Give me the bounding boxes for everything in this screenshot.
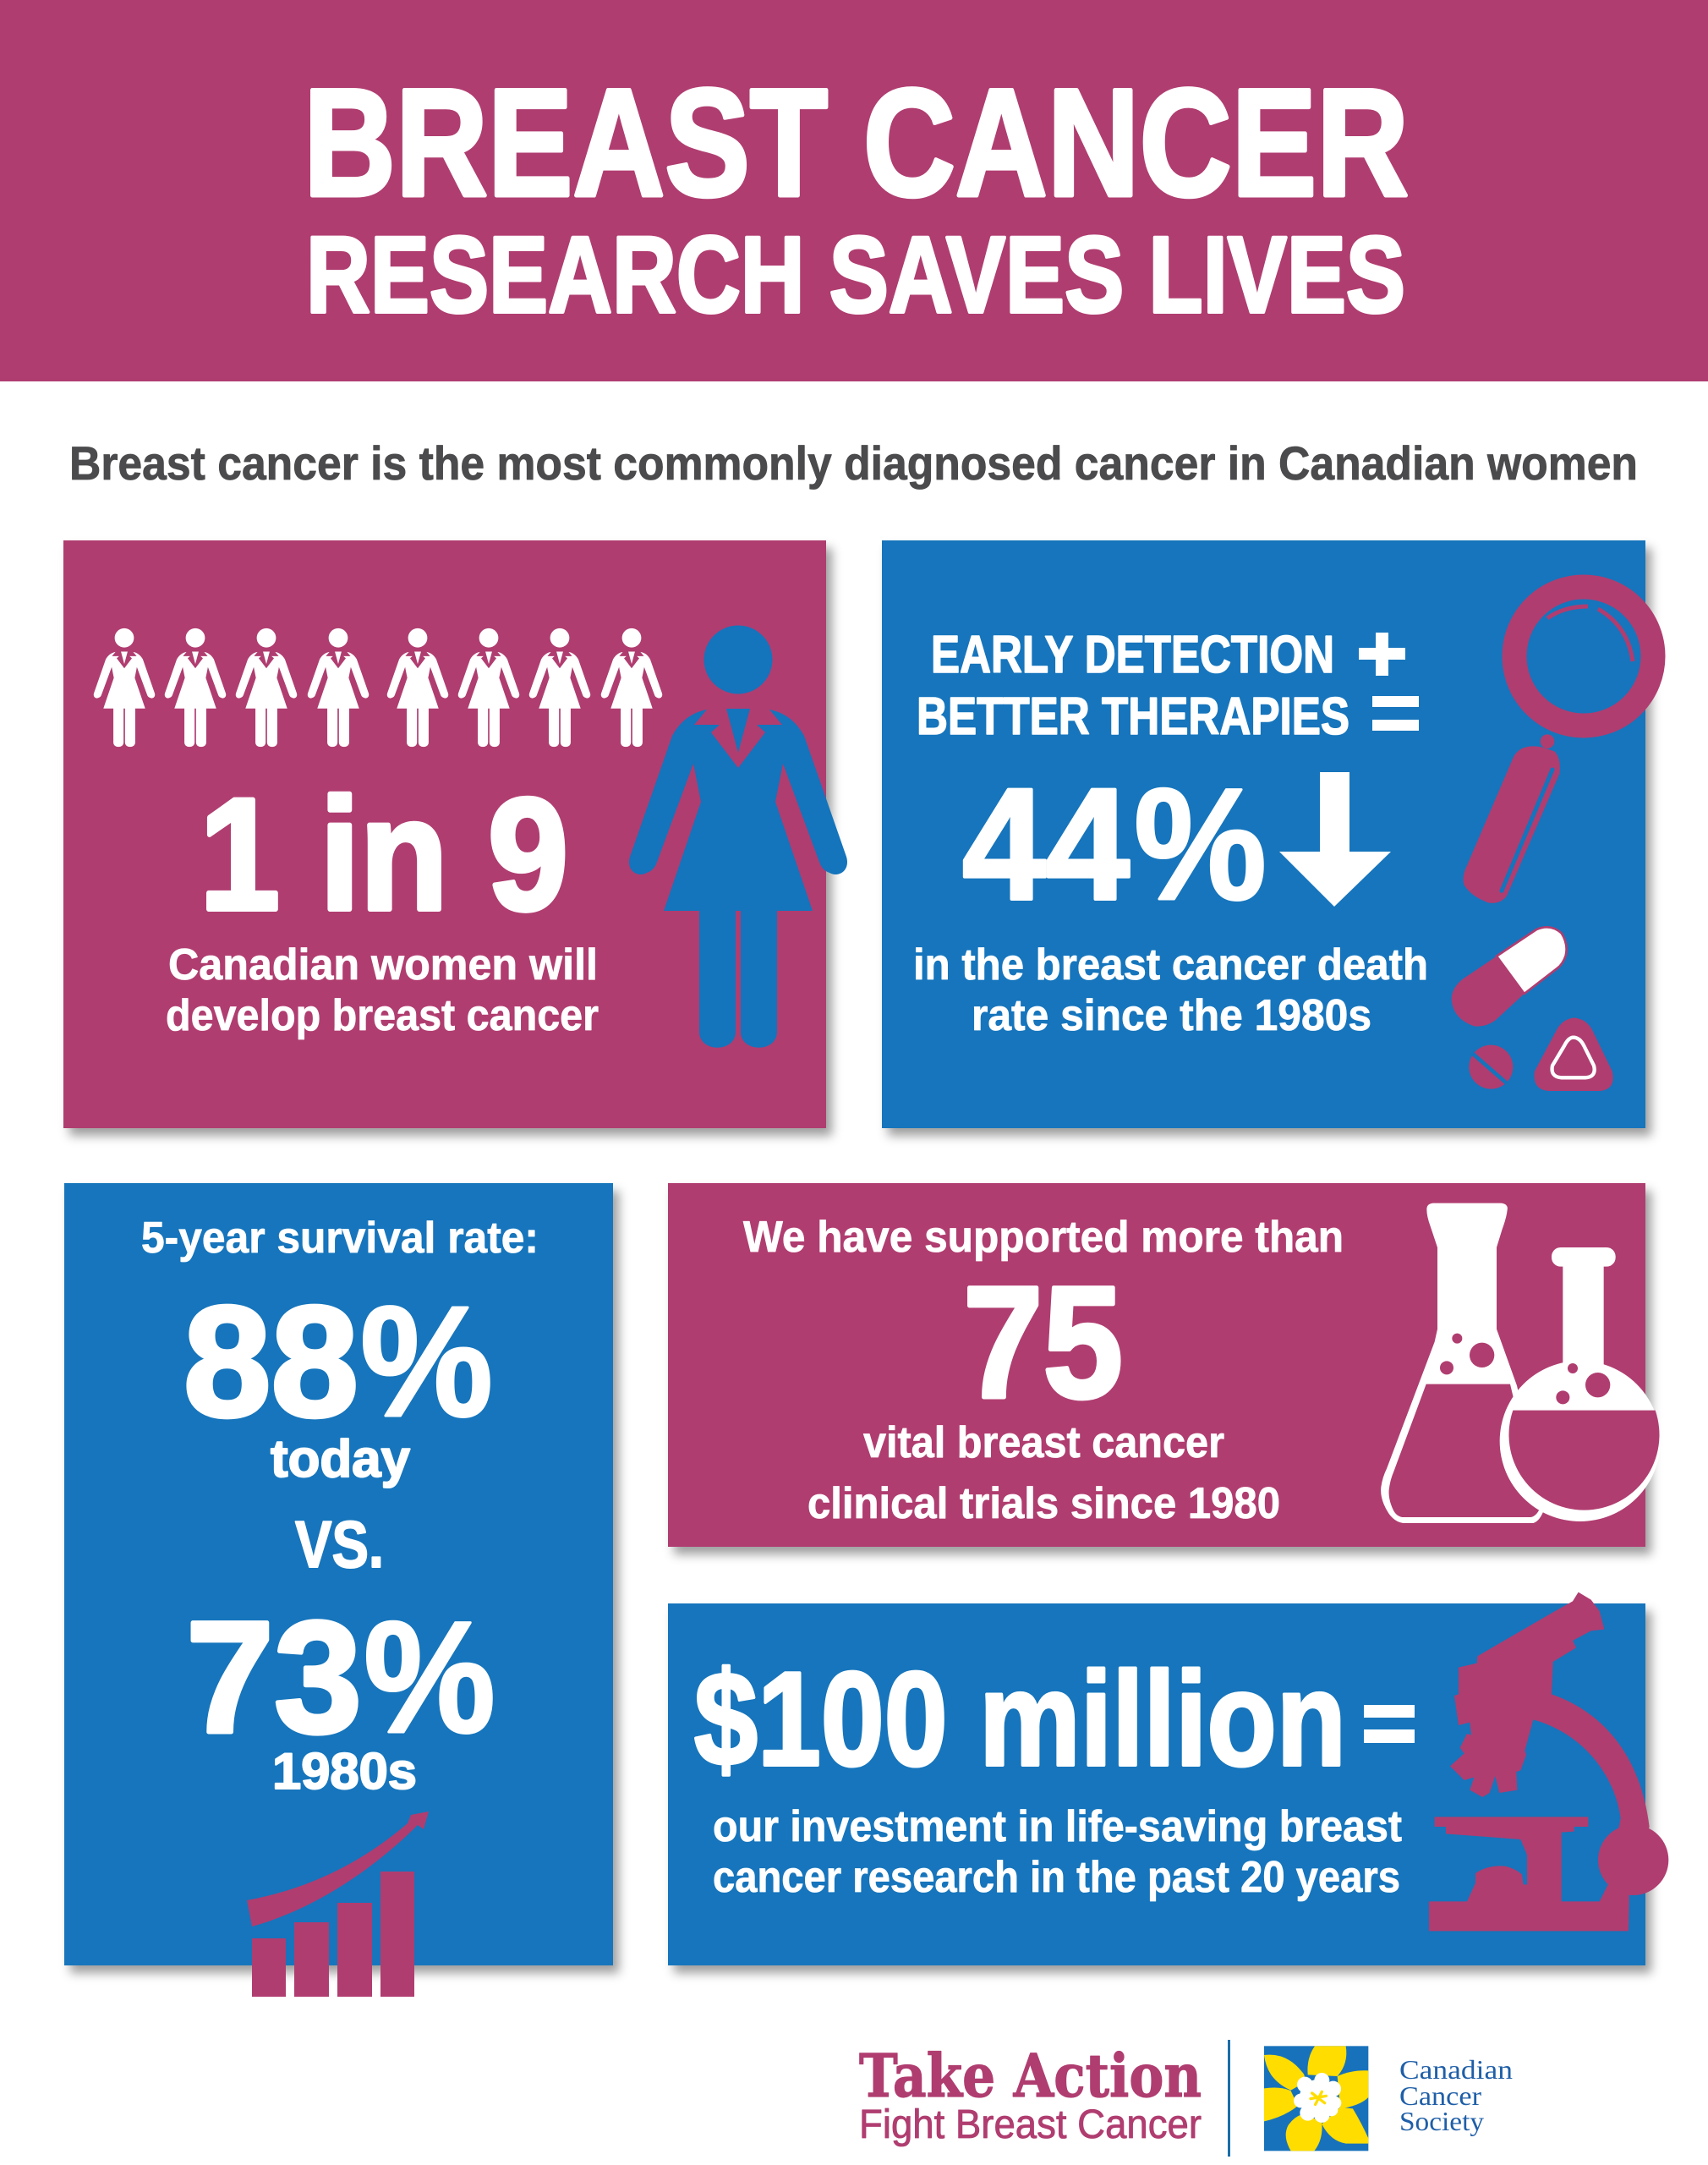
panel: 1 in 9 — [63, 540, 847, 1128]
label: versus: VS. — [295, 1507, 384, 1581]
statistic: 73 percent — [186, 1588, 495, 1766]
icon: large blue woman — [629, 626, 847, 1048]
caption: canadian women: develop breast cancer — [166, 991, 599, 1040]
panel: 44 percent — [882, 540, 1653, 1128]
footer text: canadian cancer society: Canadian — [1399, 2054, 1513, 2085]
statistic: 88 percent: 88 — [183, 1274, 359, 1450]
label: 1980s: 1980s — [272, 1743, 417, 1800]
icon: capsule — [1452, 927, 1567, 1027]
caption: death rate: rate since the 1980s — [972, 991, 1371, 1040]
footer logo: take action: Take Action — [859, 2041, 1202, 2111]
icon: conical flask — [1381, 1203, 1545, 1523]
arrow: down — [1279, 772, 1391, 907]
icon: equals sign — [1364, 1705, 1415, 1743]
caption: investment: our investment in life-saving breast — [713, 1802, 1402, 1851]
caption: investment — [713, 1802, 1402, 1902]
statistic: 44 percent: % — [1134, 755, 1267, 933]
icon: round pill — [1469, 1045, 1513, 1089]
footer text: canadian cancer society: Cancer — [1399, 2080, 1481, 2111]
caption: death rate — [913, 940, 1428, 1040]
heading: early detection plus better therapies: EARLY DETECTION — [931, 626, 1334, 684]
caption: clinical trials: vital breast cancer — [863, 1418, 1224, 1467]
label: today: today — [271, 1430, 411, 1488]
heading: early detection plus better therapies: BETTER THERAPIES — [917, 688, 1349, 746]
heading: early detection plus better therapies — [917, 626, 1419, 746]
title: research saves lives: RESEARCH SAVES LIVES — [306, 215, 1405, 336]
icon: rising bar chart — [247, 1811, 429, 1997]
panel: clinical trials — [668, 1183, 1661, 1547]
statistic: 44 percent: 44 — [962, 755, 1130, 933]
statistic: 88 percent: % — [360, 1274, 493, 1450]
caption: death rate: in the breast cancer death — [913, 940, 1428, 989]
footer logo: daffodil — [1264, 2046, 1368, 2151]
caption: clinical trials — [807, 1418, 1280, 1528]
caption: canadian women — [166, 940, 599, 1040]
caption: canadian women: Canadian women will — [168, 940, 598, 989]
statistic: 100 million: $100 million — [694, 1645, 1346, 1794]
statistic: 73 percent: % — [364, 1588, 495, 1766]
panel: 100 million investment — [668, 1592, 1668, 1965]
title: breast cancer: BREAST CANCER — [304, 58, 1409, 228]
heading: 5-year survival rate: 5-year survival rate: — [141, 1214, 539, 1263]
footer logo: take action — [859, 2041, 1202, 2147]
statistic: 44 percent — [962, 755, 1267, 933]
caption: investment: cancer research in the past 20 years — [713, 1853, 1400, 1902]
caption: clinical trials: clinical trials since 1980 — [807, 1479, 1280, 1528]
icon: magnifying glass — [1464, 587, 1653, 903]
statistic: 73 percent: 73 — [186, 1588, 362, 1766]
icon: round flask — [1500, 1247, 1661, 1521]
header banner — [0, 0, 1708, 381]
statistic: 1 in 9: 1 in 9 — [200, 765, 568, 943]
panel: survival rate — [64, 1183, 613, 1997]
icon: triangle pill — [1535, 1017, 1613, 1091]
icon: microscope — [1429, 1592, 1668, 1931]
footer logo: take action: Fight Breast Cancer — [859, 2102, 1202, 2147]
statistic: 88 percent — [183, 1274, 493, 1450]
icon row: eight small women — [94, 628, 662, 747]
text: we have supported: We have supported more than — [743, 1213, 1344, 1262]
statistic: 75: 75 — [963, 1253, 1123, 1431]
footer text: canadian cancer society: Society — [1399, 2106, 1484, 2136]
footer text: canadian cancer society — [1399, 2054, 1513, 2136]
